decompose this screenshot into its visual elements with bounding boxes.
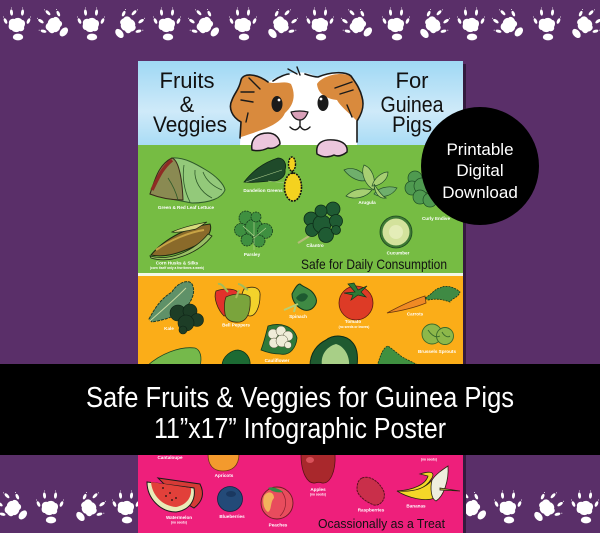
panel: orange veggies <box>138 276 463 366</box>
badge: printable digital download: Digital <box>456 161 504 180</box>
cilantro: Cilantro <box>306 243 324 248</box>
tomato: (no seeds or leaves) <box>339 325 369 329</box>
tomato <box>339 283 373 329</box>
kale <box>149 282 204 334</box>
lettuce <box>150 158 225 210</box>
curly endive: Curly Endive <box>422 216 450 221</box>
dandelion greens <box>243 157 302 201</box>
blueberry: Blueberries <box>219 514 245 519</box>
panel: occasional treats <box>138 450 463 533</box>
watermelon <box>147 478 202 524</box>
watermelon: Watermelon <box>166 515 192 520</box>
cucumber <box>380 216 412 256</box>
title right <box>380 68 444 137</box>
cauliflower <box>261 324 297 363</box>
peach: Peaches <box>269 522 288 528</box>
dandelion greens: Dandelion Greens <box>243 188 283 193</box>
brussels sprouts: Brussels Sprouts <box>418 349 456 354</box>
tomato: Tomato <box>345 319 361 324</box>
herb <box>377 346 420 366</box>
title right: Pigs <box>392 112 432 137</box>
peach <box>261 487 293 528</box>
title right: For <box>396 68 428 93</box>
banana: Bananas <box>406 504 426 508</box>
title left <box>153 68 227 137</box>
apple <box>301 454 335 496</box>
raspberry: Raspberries <box>358 508 385 512</box>
apricot: Apricots <box>215 473 234 478</box>
banana <box>397 466 460 508</box>
spinach: Spinach <box>289 314 307 319</box>
watermelon: (no seeds) <box>171 520 187 524</box>
title left: Veggies <box>153 112 227 137</box>
banner <box>0 364 600 455</box>
cucumber: Cucumber <box>387 250 410 256</box>
lettuce: Green & Red Leaf Lettuce <box>158 205 215 210</box>
panel: poster header <box>138 61 463 145</box>
banner title: Safe Fruits & Veggies for Guinea Pigs <box>86 382 514 414</box>
top paw print row <box>3 3 600 46</box>
curly endive <box>405 171 450 221</box>
bottom paw print row <box>0 486 599 529</box>
section heading: Ocassionally as a Treat <box>318 516 445 531</box>
parsley <box>234 211 272 257</box>
corn <box>150 222 212 270</box>
berry label: (no seeds) <box>421 458 437 462</box>
corn: (corn itself only a few times a week) <box>150 266 204 270</box>
corn: Corn Husks & Silks <box>156 260 199 266</box>
bell peppers: Bell Peppers <box>222 322 250 328</box>
apple: Apples <box>310 487 326 492</box>
carrots: Carrots <box>407 312 424 316</box>
apple: (no seeds) <box>310 492 326 496</box>
raspberry <box>357 477 385 512</box>
spinach <box>284 284 316 319</box>
panel: safe for daily consumption <box>138 145 463 273</box>
arugula: Arugula <box>358 200 376 205</box>
badge: printable digital download: Download <box>442 183 518 202</box>
blueberry <box>218 486 245 519</box>
cabbage <box>310 336 357 366</box>
cilantro <box>298 202 342 248</box>
arugula <box>344 165 397 205</box>
cauliflower: Cauliflower <box>265 358 290 363</box>
broccoli <box>222 350 250 366</box>
poster shadow <box>141 64 466 533</box>
title right: Guinea <box>380 92 444 117</box>
title left: & <box>180 92 195 117</box>
badge: printable digital download <box>421 107 539 225</box>
apricot <box>208 454 239 478</box>
brussels sprouts <box>418 324 456 354</box>
badge: printable digital download: Printable <box>446 140 514 159</box>
divider <box>138 273 463 276</box>
banner subtitle: 11”x17” Infographic Poster <box>154 413 446 445</box>
illustration: guinea pig <box>230 67 363 157</box>
section heading: Safe for Daily Consumption <box>301 256 447 272</box>
cantaloupe label: Cantaloupe <box>157 455 183 460</box>
romaine <box>147 348 201 366</box>
parsley: Parsley <box>244 252 261 257</box>
bell peppers <box>215 284 260 328</box>
title left: Fruits <box>160 68 214 93</box>
carrots <box>387 286 460 316</box>
kale: Kale <box>164 326 174 331</box>
